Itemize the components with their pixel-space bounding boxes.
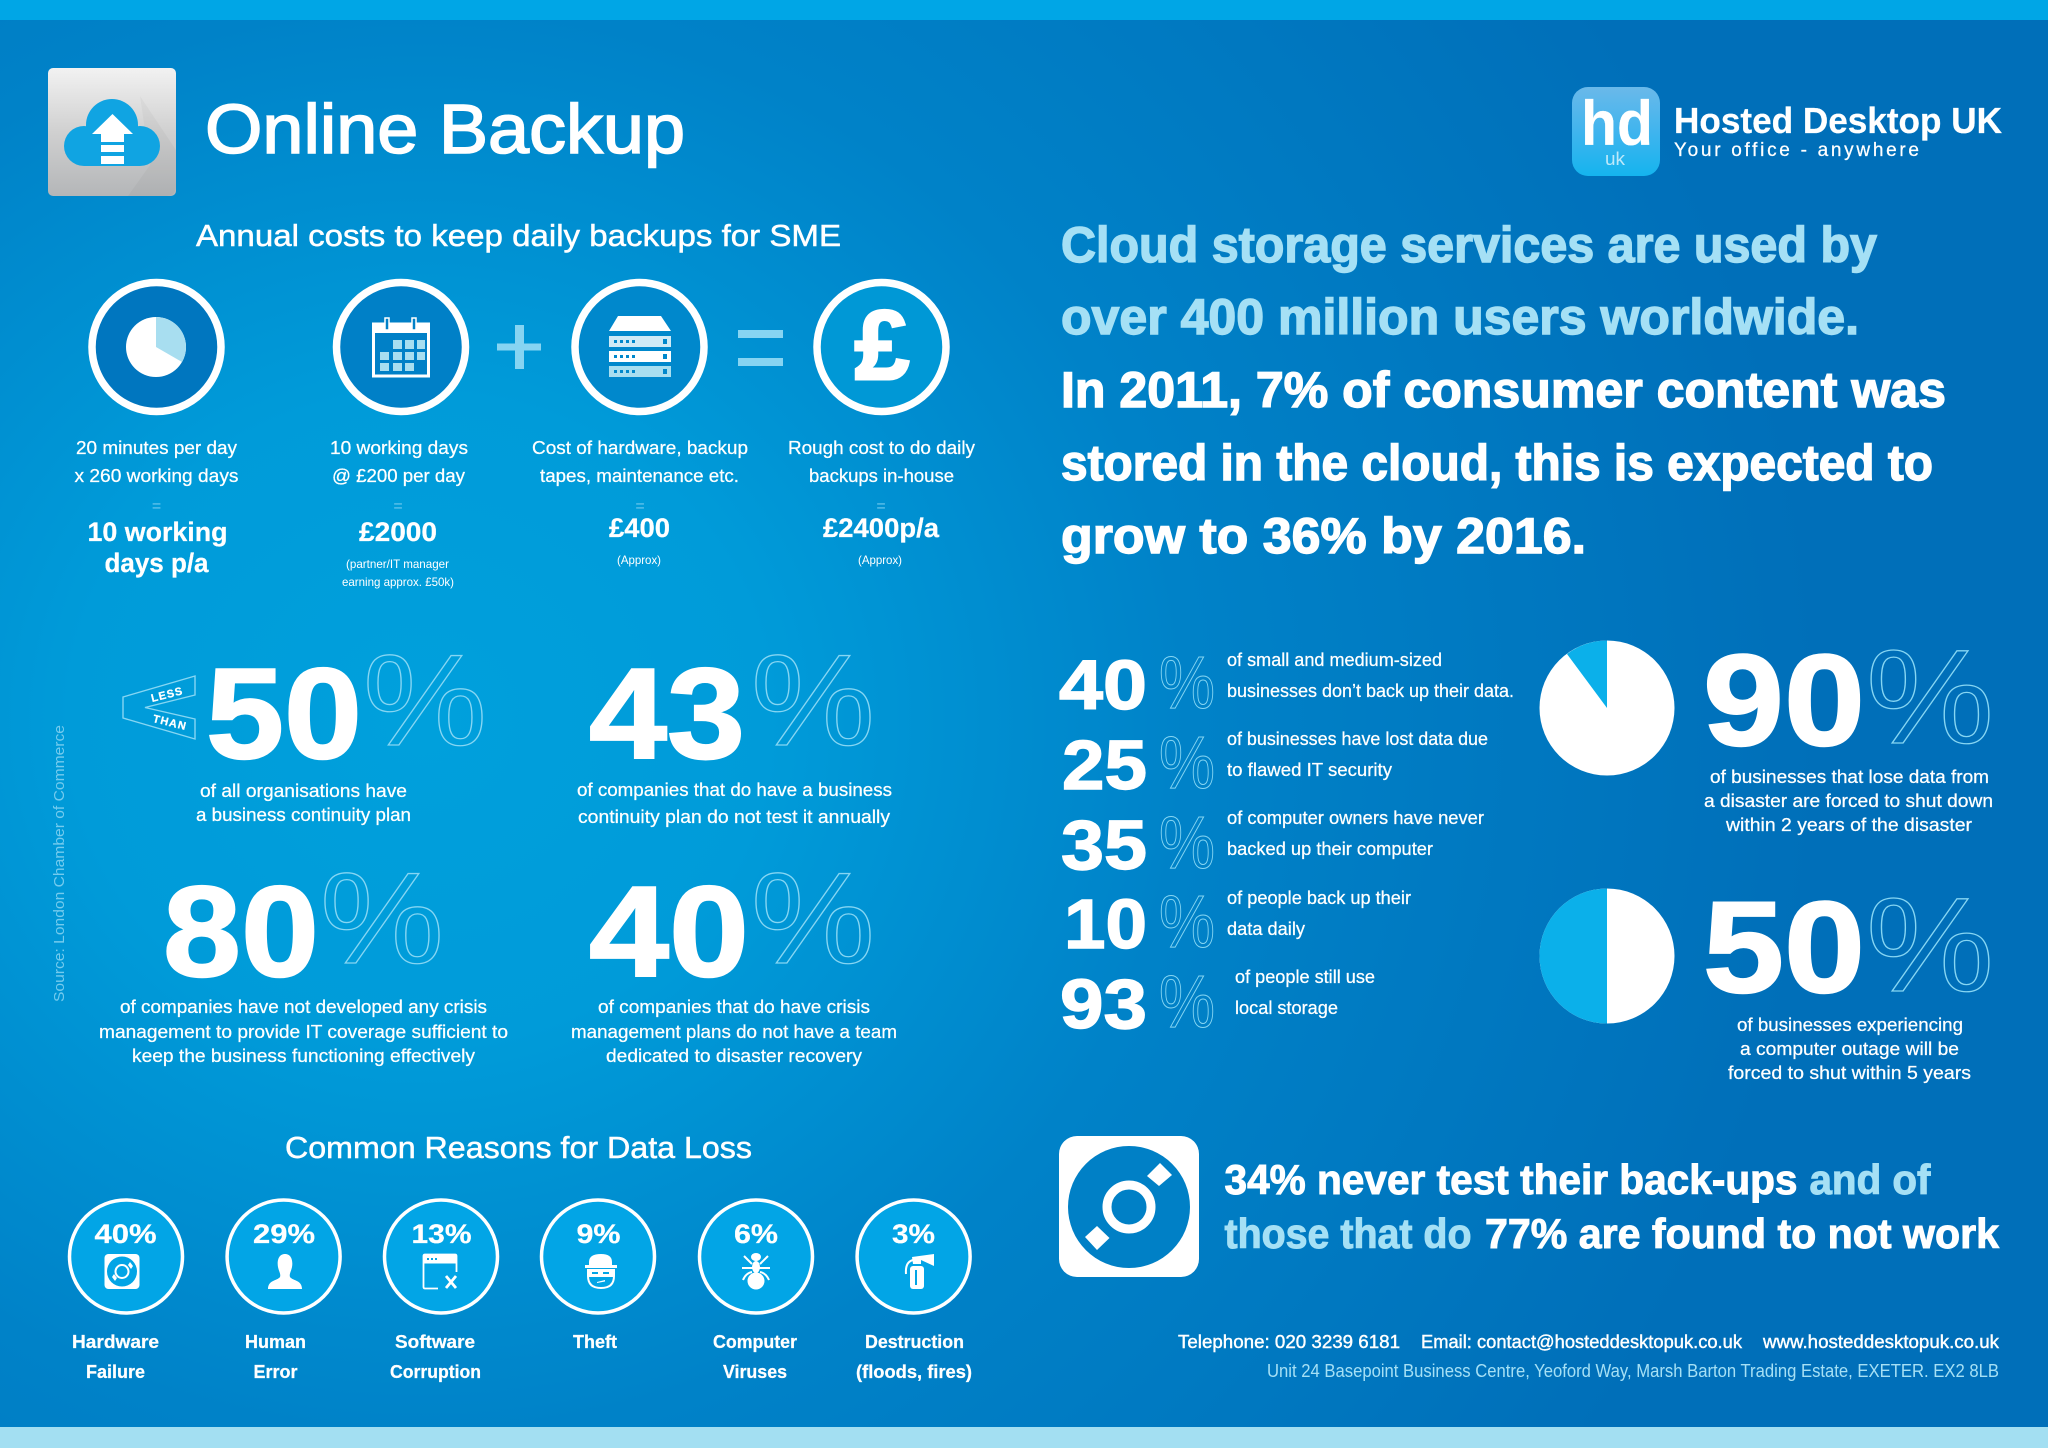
text: rough total cost: =: [876, 498, 886, 515]
icon: large hard disk tile: [1059, 1136, 1199, 1277]
stat: 40 percent crisis plans: management plans do not have a team: [571, 1021, 897, 1042]
icon: person: [268, 1254, 302, 1289]
stat row: 10 percent: data daily: [1227, 918, 1306, 939]
callout: back-up testing: 77% are found to not work: [1485, 1210, 2000, 1257]
headline: cloud storage statement: grow to 36% by 2016.: [1061, 508, 1586, 564]
panel: computer viruses: Computer: [713, 1332, 797, 1352]
callout: back-up testing: those that do: [1224, 1210, 1472, 1257]
panel: annual costs column 4: [788, 282, 975, 567]
stat: 43 percent: [577, 627, 892, 827]
icon: cloud upload tile: [48, 68, 176, 196]
panel: software corruption: Software: [395, 1332, 475, 1352]
stat: 80 percent: 80: [163, 860, 319, 1004]
icon: fire extinguisher: [906, 1254, 934, 1289]
logo: Hosted Desktop UK: Hosted Desktop UK: [1674, 100, 2002, 141]
panel: hardware failure: Hardware: [72, 1332, 159, 1352]
stat: less than 50 percent: 50: [206, 642, 362, 786]
stat: 50 percent with pie: forced to shut within 5 years: [1728, 1062, 1971, 1083]
stat: 80 percent: management to provide IT coverage sufficient to: [99, 1021, 508, 1042]
icon: less-than sign: THAN: [152, 713, 188, 733]
headline: cloud storage statement: Cloud storage services are used by: [1061, 217, 1877, 273]
stat: 80 percent: keep the business functioning effectively: [132, 1045, 476, 1066]
text: hardware cost: tapes, maintenance etc.: [540, 466, 739, 486]
panel: human error: Human: [245, 1332, 306, 1352]
callout: back-up testing: and of: [1810, 1156, 1931, 1203]
icon: pound circle: £: [855, 290, 909, 400]
callout: back-up testing: 34% never test their back-ups: [1224, 1156, 1798, 1203]
text: rough total cost: (Approx): [858, 553, 902, 567]
text: time per day: x 260 working days: [74, 466, 238, 486]
stat: 90 percent with pie: [1540, 623, 1994, 835]
stat row: 35 percent: of computer owners have never: [1227, 807, 1484, 828]
panel: hardware failure: 40%: [94, 1219, 156, 1249]
panel: computer viruses: [700, 1200, 812, 1382]
source note: Source: London Chamber of Commerce: [51, 725, 68, 1002]
headline: cloud storage statement: [1061, 217, 1946, 564]
panel: software corruption: Corruption: [390, 1362, 481, 1382]
headline: cloud storage statement: In 2011, 7% of consumer content was: [1061, 362, 1946, 418]
stat row: 40 percent: [1059, 641, 1514, 724]
stat row: 10 percent: of people back up their: [1227, 887, 1411, 908]
icon: plus sign: [497, 325, 541, 369]
stat: 50 percent with pie: 50: [1703, 874, 1865, 1020]
logo: Hosted Desktop UK: hd: [1581, 89, 1653, 159]
title: Online Backup: [205, 90, 685, 168]
panel: human error: [227, 1200, 340, 1382]
icon: less-than sign: LESS: [150, 685, 185, 705]
stat row: 35 percent: backed up their computer: [1227, 838, 1433, 859]
stat row: 93 percent: 93: [1060, 965, 1147, 1043]
panel: annual costs column 1: [74, 282, 238, 578]
text: rough total cost: [788, 438, 975, 567]
stat row: 93 percent: local storage: [1235, 997, 1338, 1018]
icon: calendar circle: [336, 282, 466, 412]
stat: less than 50 percent: a business continuity plan: [196, 804, 411, 825]
panel: human error: 29%: [253, 1219, 315, 1249]
panel: annual costs column 2: [330, 282, 468, 589]
stat: 90 percent with pie: %: [1866, 623, 1994, 772]
panel: theft: Theft: [573, 1332, 617, 1352]
stat: 40 percent crisis plans: 40: [589, 860, 749, 1004]
icon: software window: [424, 1254, 456, 1288]
text: working days cost: earning approx. £50k): [342, 575, 454, 589]
text: rough total cost: Rough cost to do daily: [788, 438, 975, 458]
pie chart: 90 percent: [1540, 640, 1674, 776]
stat: 90 percent with pie: a disaster are forced to shut down: [1704, 790, 1993, 811]
headline: cloud storage statement: stored in the cloud, this is expected to: [1061, 435, 1933, 491]
panel: theft: [542, 1200, 654, 1352]
stat row: 40 percent: businesses don’t back up their data.: [1227, 680, 1514, 701]
panel: annual costs column 3: [532, 282, 748, 567]
stat: 90 percent with pie: within 2 years of the disaster: [1725, 814, 1972, 835]
stat row: 35 percent: 35: [1061, 806, 1147, 884]
icon: server circle: [575, 282, 704, 412]
heading: annual costs: Annual costs to keep daily backups for SME: [196, 218, 841, 253]
stat: less than 50 percent: of all organisations have: [200, 780, 407, 801]
panel: destruction: Destruction: [865, 1332, 964, 1352]
stat row: 93 percent: [1060, 960, 1375, 1043]
icon: less-than sign: [123, 676, 195, 739]
stat: less than 50 percent: [123, 627, 487, 825]
text: working days cost: @ £200 per day: [332, 466, 465, 486]
stat row: 25 percent: %: [1159, 721, 1215, 804]
stat: 43 percent: of companies that do have a business: [577, 779, 892, 800]
stat: 40 percent crisis plans: %: [751, 845, 875, 991]
stat: less than 50 percent: %: [363, 627, 487, 773]
panel: human error: Error: [254, 1362, 298, 1382]
text: time per day: 10 working: [88, 517, 228, 547]
top band: [0, 0, 2048, 20]
heading: common reasons: Common Reasons for Data Loss: [285, 1130, 752, 1165]
stat: 40 percent crisis plans: dedicated to disaster recovery: [606, 1045, 863, 1066]
icon: pie clock circle: [92, 282, 221, 412]
stat row: 40 percent: of small and medium-sized: [1227, 649, 1442, 670]
stat: 90 percent with pie: 90: [1703, 627, 1865, 773]
panel: computer viruses: 6%: [734, 1219, 778, 1249]
stat: 50 percent with pie: a computer outage will be: [1740, 1038, 1959, 1059]
stat row: 40 percent: 40: [1059, 646, 1147, 724]
stat row: 25 percent: 25: [1062, 726, 1147, 804]
stat row: 10 percent: [1064, 880, 1411, 963]
stat row: 10 percent: %: [1159, 880, 1215, 963]
stat: 40 percent crisis plans: of companies that do have crisis: [598, 996, 870, 1017]
panel: destruction: (floods, fires): [856, 1362, 972, 1382]
icon: thief: [585, 1254, 617, 1288]
stat: 80 percent: [99, 845, 508, 1066]
panel: theft: 9%: [576, 1219, 620, 1249]
logo: Hosted Desktop UK: Your office - anywhere: [1674, 140, 1919, 161]
stat row: 25 percent: [1062, 721, 1488, 804]
text: working days cost: (partner/IT manager: [346, 557, 449, 571]
text: working days cost: £2000: [359, 517, 437, 547]
text: hardware cost: [532, 438, 748, 567]
stat: 43 percent: 43: [589, 642, 745, 786]
contact details: Telephone: 020 3239 6181: [1178, 1332, 1400, 1352]
icon: hard disk: [104, 1254, 140, 1289]
text: time per day: [74, 438, 238, 578]
stat: 80 percent: of companies have not developed any crisis: [120, 996, 487, 1017]
stat row: 25 percent: to flawed IT security: [1227, 759, 1393, 780]
text: rough total cost: £2400p/a: [823, 513, 940, 543]
stat: 80 percent: %: [320, 845, 444, 991]
text: time per day: =: [152, 498, 161, 515]
stat: 50 percent with pie: [1540, 871, 1994, 1083]
icon: bug: [742, 1253, 770, 1290]
stat row: 25 percent: of businesses have lost data due: [1227, 728, 1488, 749]
panel: destruction: 3%: [892, 1219, 935, 1249]
text: hardware cost: =: [635, 498, 645, 515]
contact details: Email: contact@hosteddesktopuk.co.uk: [1421, 1332, 1743, 1352]
stat: 40 percent crisis plans: [571, 845, 897, 1066]
text: hardware cost: (Approx): [617, 553, 661, 567]
text: hardware cost: £400: [609, 513, 670, 543]
pie chart: 50 percent: [1540, 888, 1674, 1024]
contact details: Unit 24 Basepoint Business Centre, Yeoford Way, Marsh Barton Trading Estate, EXETER. EX2 8LB: [1267, 1361, 1999, 1381]
text: rough total cost: backups in-house: [809, 466, 954, 486]
stat: 90 percent with pie: of businesses that lose data from: [1710, 766, 1989, 787]
contact details: [1178, 1332, 2000, 1381]
text: working days cost: =: [393, 498, 403, 515]
stat row: 10 percent: 10: [1064, 885, 1147, 963]
stat: 43 percent: %: [751, 627, 875, 773]
logo: Hosted Desktop UK: [1572, 87, 2002, 176]
stat row: 35 percent: [1061, 801, 1484, 884]
text: time per day: 20 minutes per day: [76, 438, 237, 458]
stat: 50 percent with pie: %: [1866, 871, 1994, 1020]
text: time per day: days p/a: [104, 548, 209, 578]
stat row: 93 percent: of people still use: [1235, 966, 1375, 987]
text: working days cost: [330, 438, 468, 589]
panel: software corruption: 13%: [412, 1219, 472, 1249]
panel: hardware failure: [70, 1200, 182, 1382]
panel: hardware failure: Failure: [86, 1362, 145, 1382]
stat: 43 percent: continuity plan do not test it annually: [578, 806, 891, 827]
stat row: 40 percent: %: [1159, 641, 1215, 724]
text: working days cost: 10 working days: [330, 438, 468, 458]
text: hardware cost: Cost of hardware, backup: [532, 438, 748, 458]
stat row: 93 percent: %: [1159, 960, 1215, 1043]
panel: computer viruses: Viruses: [723, 1362, 787, 1382]
callout: back-up testing: [1224, 1156, 2000, 1257]
stat row: 35 percent: %: [1159, 801, 1215, 884]
icon: pound circle: [817, 282, 946, 412]
contact details: www.hosteddesktopuk.co.uk: [1762, 1332, 2000, 1352]
panel: software corruption: [384, 1200, 498, 1382]
logo: Hosted Desktop UK: uk: [1605, 149, 1626, 169]
panel: destruction: [856, 1200, 972, 1382]
headline: cloud storage statement: over 400 million users worldwide.: [1061, 289, 1859, 345]
bottom band: [0, 1427, 2048, 1448]
icon: equals sign: [738, 330, 783, 366]
stat: 50 percent with pie: of businesses experiencing: [1737, 1014, 1963, 1035]
